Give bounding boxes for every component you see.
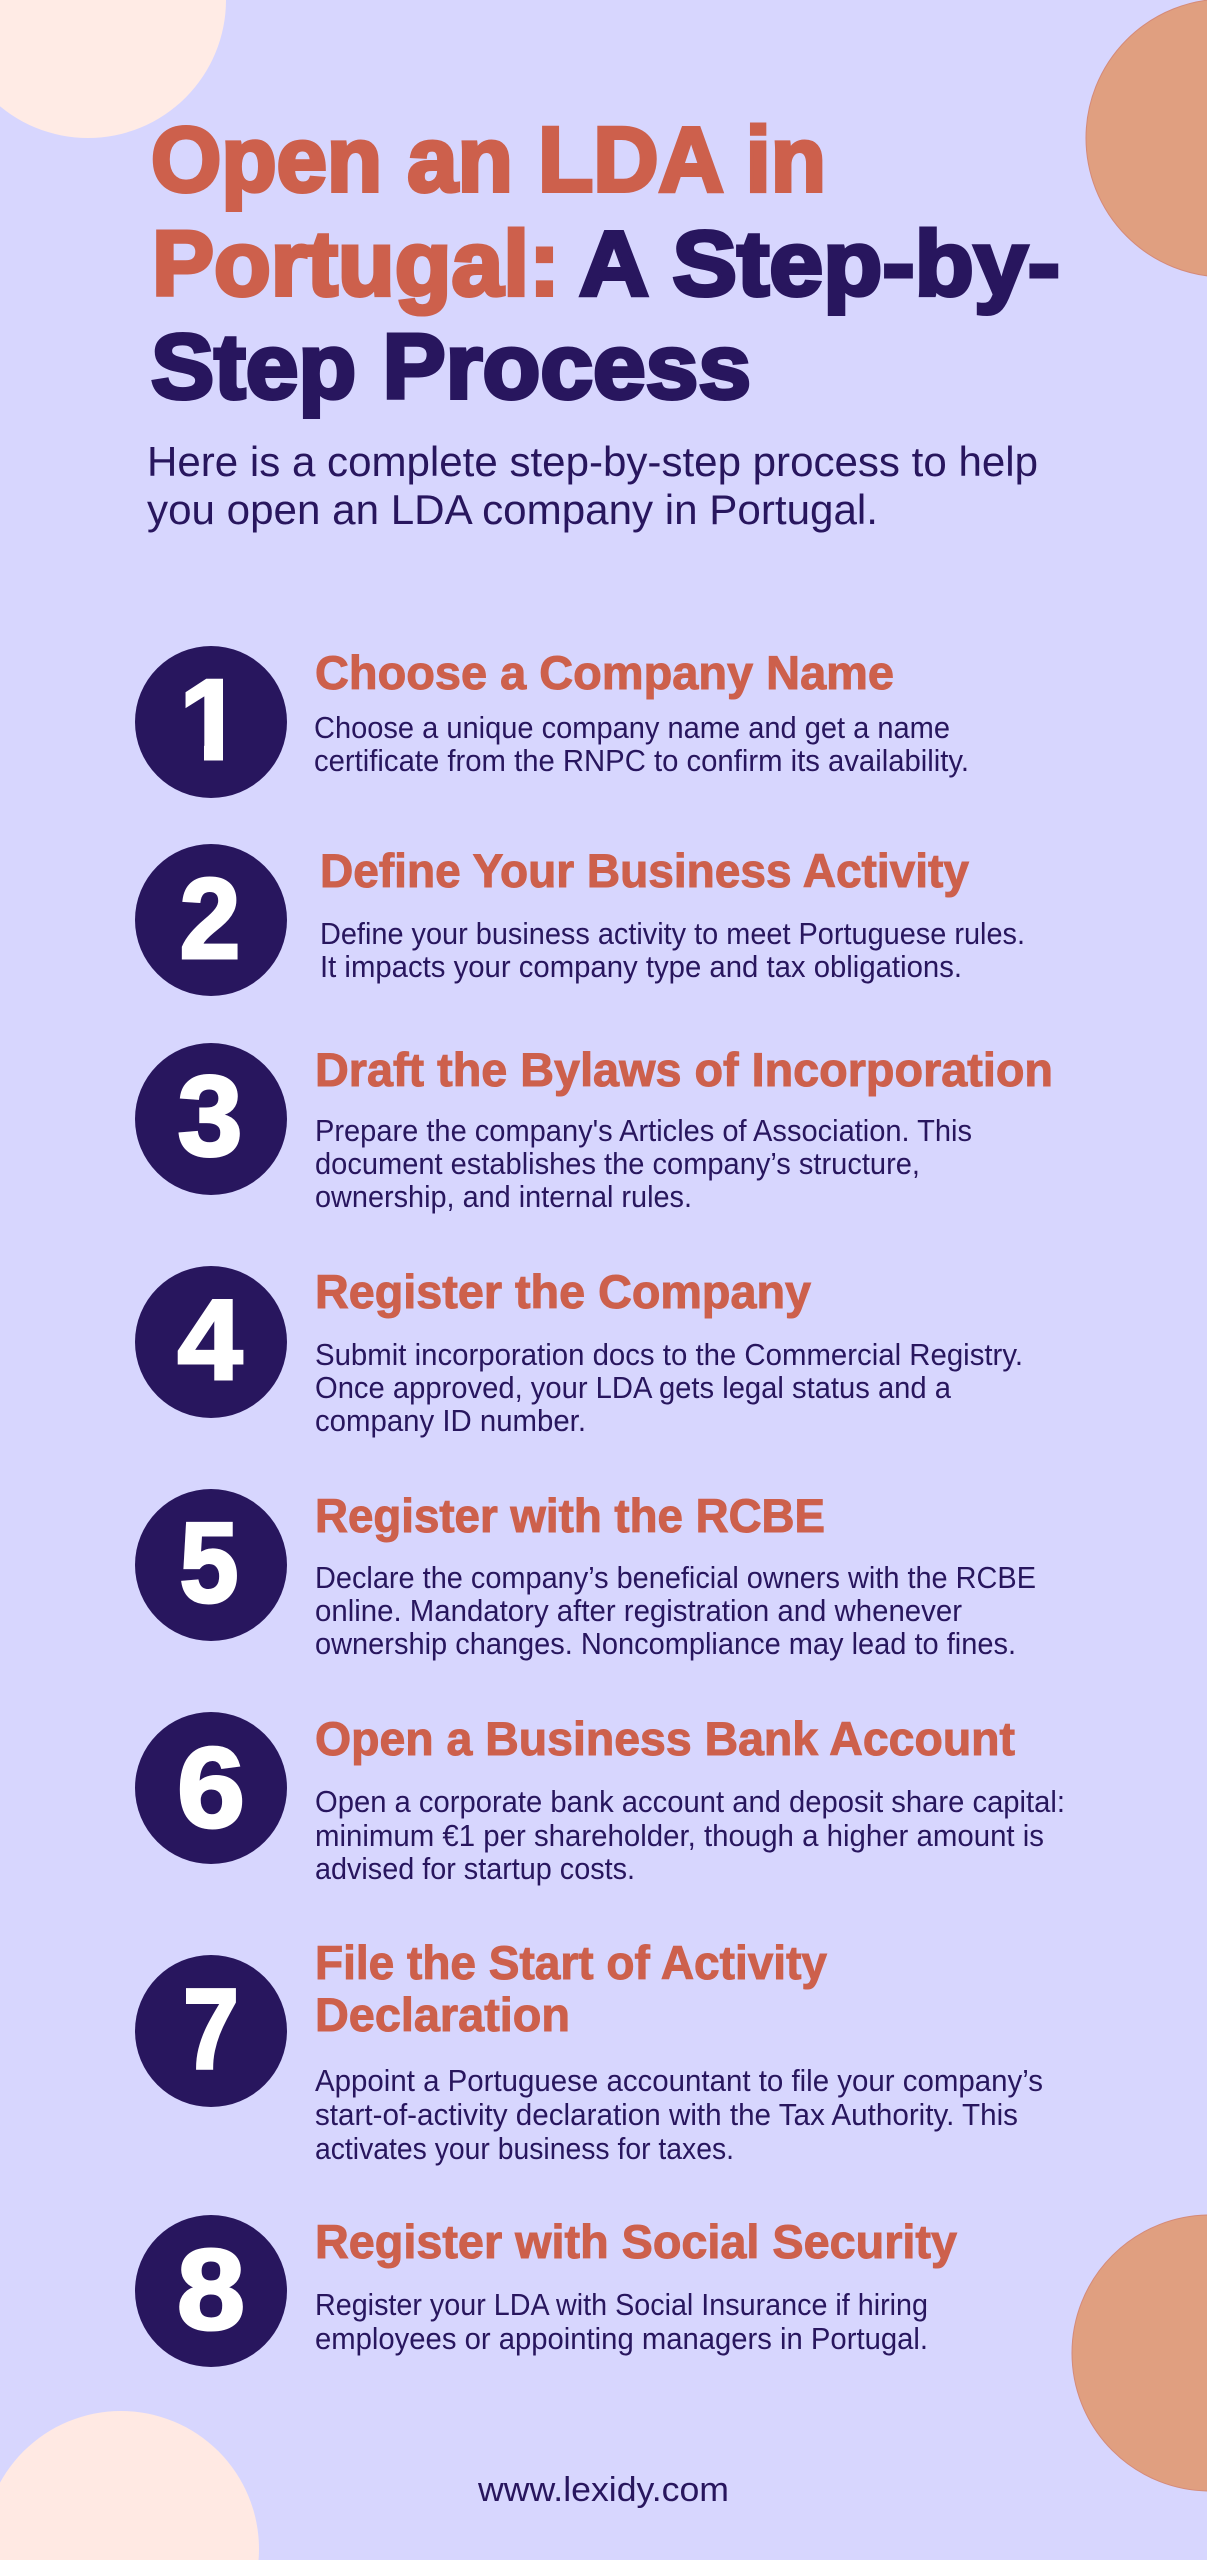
website footer: www.lexidy.com — [477, 2471, 729, 2509]
step 6 description: advised for startup costs. — [315, 1851, 635, 1886]
step 6 description: Open a corporate bank account and deposit share capital: — [315, 1784, 1065, 1819]
step 7 heading: Declaration — [315, 1988, 570, 2041]
decorative circle top right — [1086, 0, 1207, 277]
step 7 description — [315, 2063, 1043, 2166]
step 4 description — [315, 1337, 1023, 1438]
title: Portugal: — [152, 213, 560, 315]
number badge 3: 3 — [178, 1053, 242, 1180]
step 8 — [135, 2215, 957, 2367]
step 3 description: Prepare the company's Articles of Association. This — [315, 1113, 972, 1148]
number badge 4: 4 — [178, 1277, 242, 1404]
step 2 — [135, 844, 1025, 996]
step 2 description: It impacts your company type and tax obligations. — [320, 949, 962, 984]
step 5 — [135, 1489, 1036, 1661]
step 1 — [135, 646, 969, 798]
step 7 heading: File the Start of Activity — [315, 1936, 827, 1989]
number badge 2: 2 — [180, 856, 240, 983]
number badge 2 — [135, 844, 287, 996]
step 2 heading: Define Your Business Activity — [320, 844, 969, 897]
step 8 heading: Register with Social Security — [315, 2215, 957, 2268]
step 3 description: ownership, and internal rules. — [315, 1179, 692, 1214]
step 7 — [135, 1936, 1043, 2166]
number badge 8: 8 — [177, 2227, 245, 2354]
title: A Step-by- — [579, 213, 1060, 315]
step 3 description: document establishes the company’s structure, — [315, 1146, 920, 1181]
subtitle: Here is a complete step-by-step process to help — [147, 438, 1038, 485]
step 4 heading: Register the Company — [315, 1265, 811, 1318]
step 4 description: Once approved, your LDA gets legal status and a — [315, 1370, 952, 1405]
number badge 3 — [135, 1043, 287, 1195]
step 2 description — [320, 916, 1025, 984]
decorative circle top left — [0, 0, 226, 138]
number badge 5 — [135, 1489, 287, 1641]
step 3 heading: Draft the Bylaws of Incorporation — [315, 1043, 1053, 1096]
step 5 description: ownership changes. Noncompliance may lead to fines. — [315, 1626, 1016, 1661]
number badge 7: 7 — [183, 1966, 239, 2093]
step 6 description — [315, 1784, 1065, 1886]
step 8 description — [315, 2287, 928, 2356]
step 7 description: start-of-activity declaration with the Tax Authority. This — [315, 2097, 1018, 2132]
step 2 description: Define your business activity to meet Portuguese rules. — [320, 916, 1025, 951]
decorative circle bottom left — [0, 2411, 259, 2560]
number badge 1 — [135, 646, 287, 798]
decorative circle bottom right — [1072, 2215, 1207, 2491]
step 1 description: certificate from the RNPC to confirm its availability. — [314, 743, 969, 778]
step 4 description: Submit incorporation docs to the Commercial Registry. — [315, 1337, 1023, 1372]
step 6 description: minimum €1 per shareholder, though a higher amount is — [315, 1818, 1044, 1853]
title: Step Process — [151, 316, 751, 418]
number badge 6: 6 — [177, 1725, 245, 1852]
title — [151, 109, 1060, 418]
step 4 — [135, 1265, 1023, 1438]
step 6 heading: Open a Business Bank Account — [315, 1712, 1015, 1765]
step 6 — [135, 1712, 1065, 1886]
step 5 heading: Register with the RCBE — [315, 1489, 825, 1542]
number badge 5: 5 — [180, 1500, 238, 1627]
step 5 description: online. Mandatory after registration and whenever — [315, 1593, 962, 1628]
step 7 description: activates your business for taxes. — [315, 2131, 734, 2166]
subtitle — [147, 438, 1038, 533]
step 1 description: Choose a unique company name and get a name — [314, 710, 950, 745]
step 8 description: Register your LDA with Social Insurance if hiring — [315, 2287, 928, 2322]
title: Open an LDA in — [151, 109, 826, 211]
step 4 description: company ID number. — [315, 1403, 586, 1438]
step 7 description: Appoint a Portuguese accountant to file your company’s — [315, 2063, 1043, 2098]
number badge 4 — [135, 1266, 287, 1418]
step 7 heading — [315, 1936, 827, 2041]
step 8 description: employees or appointing managers in Portugal. — [315, 2321, 928, 2356]
number badge 6 — [135, 1712, 287, 1864]
step 5 description: Declare the company’s beneficial owners with the RCBE — [315, 1560, 1036, 1595]
number badge 1: 1 — [179, 657, 243, 784]
step 3 description — [315, 1113, 972, 1214]
step 3 — [135, 1043, 1053, 1214]
number badge 7 — [135, 1955, 287, 2107]
step 5 description — [315, 1560, 1036, 1661]
step 1 description — [314, 710, 969, 778]
step 1 heading: Choose a Company Name — [315, 646, 894, 699]
number badge 8 — [135, 2215, 287, 2367]
subtitle: you open an LDA company in Portugal. — [147, 486, 878, 533]
